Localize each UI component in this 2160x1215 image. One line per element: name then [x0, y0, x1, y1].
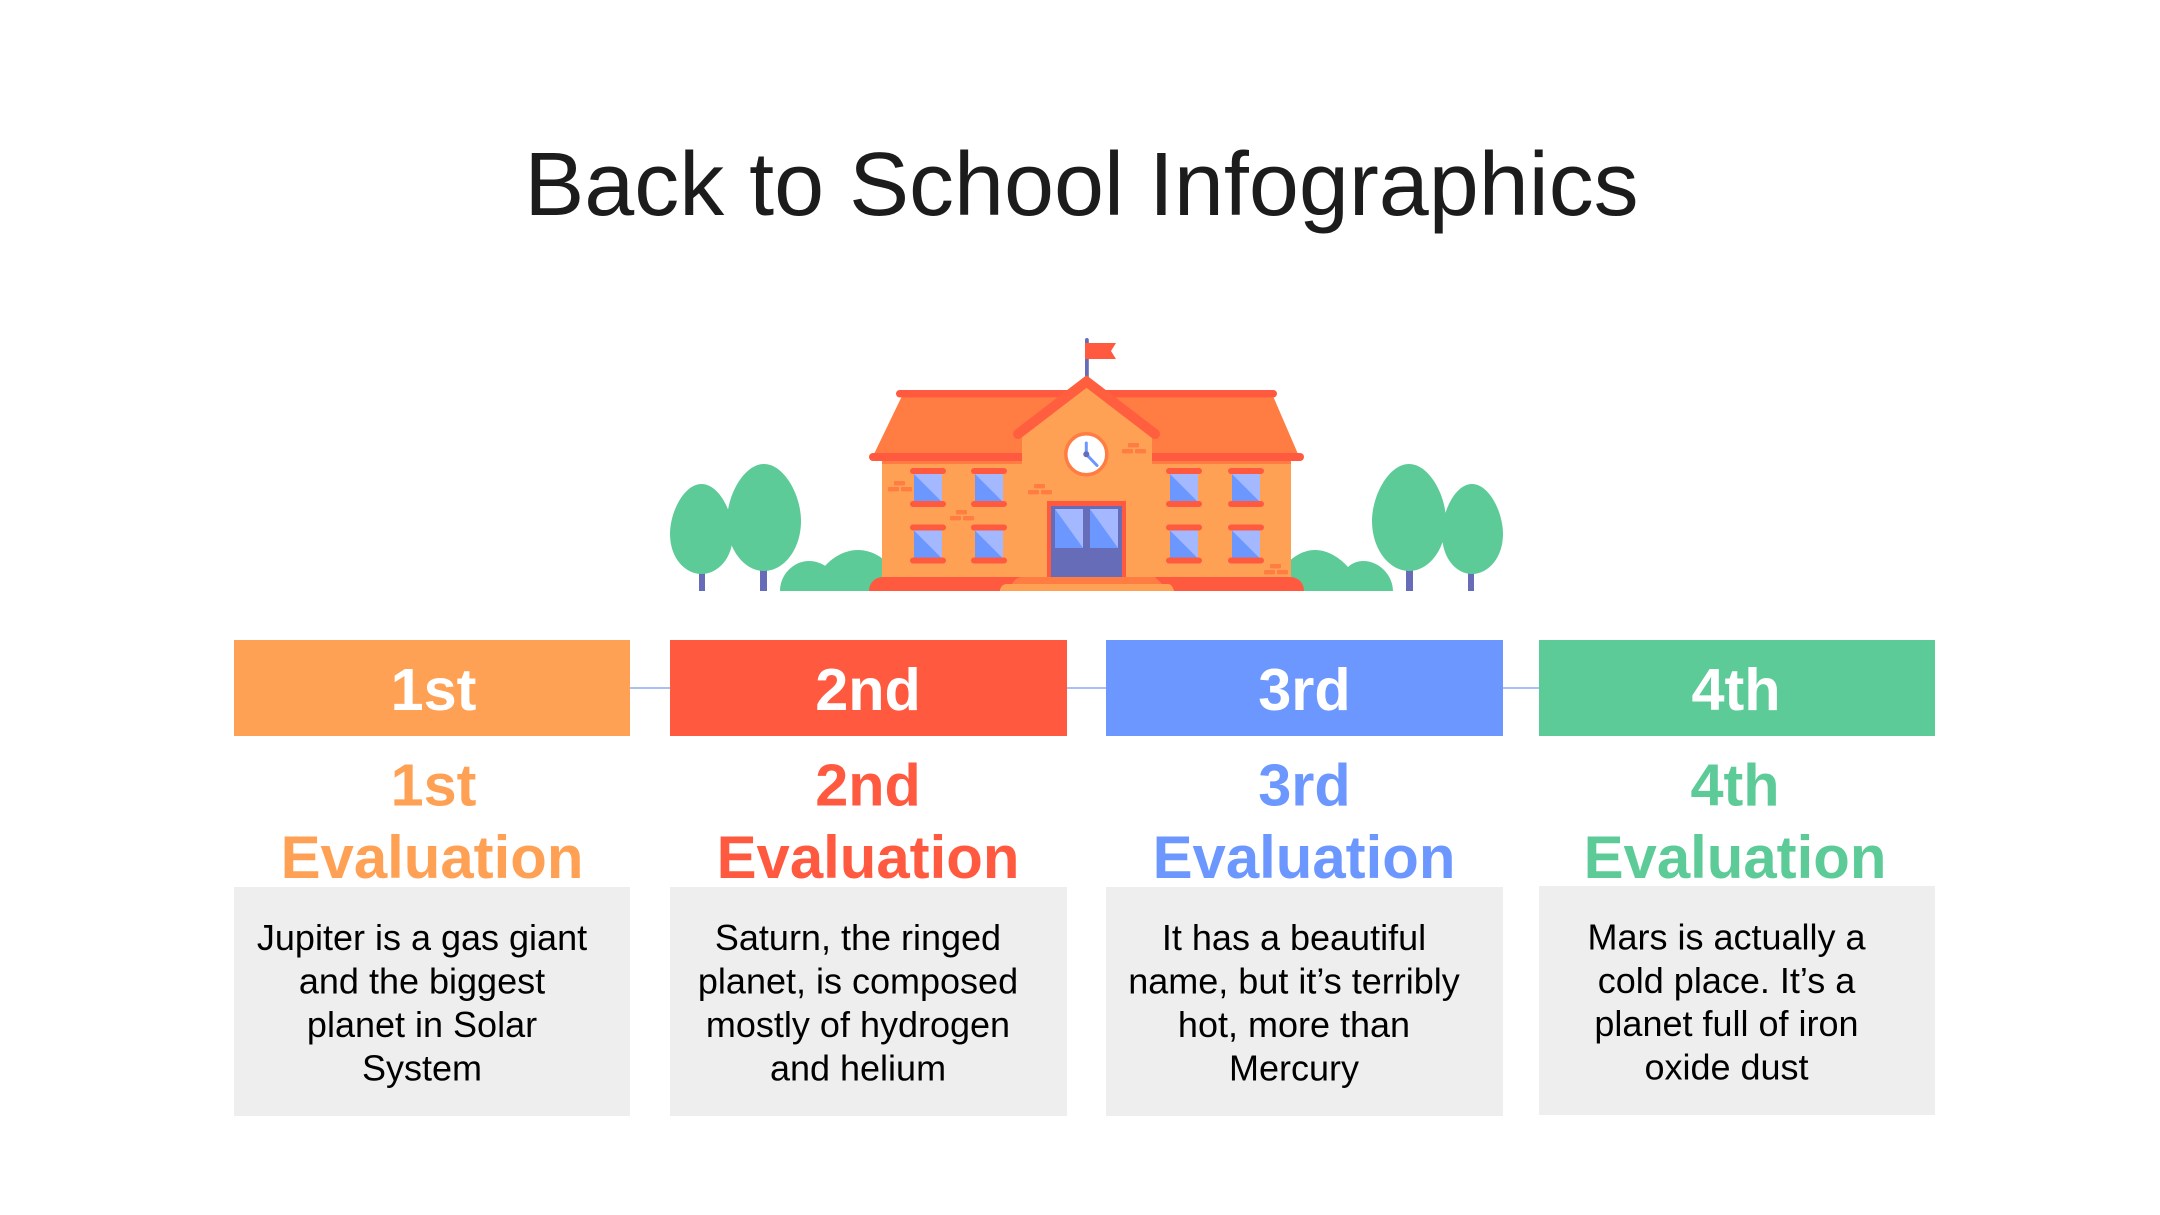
- description box: planet in Solar: [307, 1004, 537, 1045]
- description box: [1539, 886, 1935, 1115]
- panel: 2nd evaluation: [670, 640, 1067, 1116]
- header: 2nd: 2nd: [815, 656, 921, 723]
- description box: [234, 887, 630, 1116]
- header: 2nd: [670, 640, 1067, 736]
- icon: clock: [1066, 434, 1107, 475]
- panel: 4th evaluation: [1539, 640, 1935, 1115]
- description box: [1106, 887, 1503, 1116]
- panel: 3rd evaluation: [1106, 640, 1503, 1116]
- description box: Saturn, the ringed: [715, 917, 1001, 958]
- description box: planet full of iron: [1594, 1003, 1859, 1044]
- connector lines: [630, 687, 1539, 689]
- description box: System: [362, 1048, 482, 1088]
- heading: 4th Evaluation: 4th: [1690, 752, 1780, 818]
- header: 4th: 4th: [1691, 656, 1781, 723]
- icon: right bushes: [1285, 550, 1393, 591]
- heading: 2nd Evaluation: Evaluation: [717, 824, 1019, 891]
- title: Back to School Infographics: [524, 135, 1639, 235]
- description box: cold place. It’s a: [1598, 960, 1856, 1001]
- door: [1047, 501, 1126, 579]
- description box: Jupiter is a gas giant: [257, 917, 587, 958]
- description box: planet, is composed: [698, 960, 1018, 1002]
- walls: [882, 383, 1291, 585]
- description box: Mars is actually a: [1587, 916, 1867, 958]
- flag: [1085, 338, 1116, 380]
- icon: right trees: [1372, 464, 1503, 591]
- description box: Mercury: [1229, 1048, 1359, 1088]
- windows: [910, 468, 1264, 564]
- eaves: [869, 453, 1304, 464]
- heading: 3rd Evaluation: 3rd: [1258, 752, 1351, 818]
- description box: mostly of hydrogen: [706, 1004, 1010, 1045]
- description box: [670, 887, 1067, 1116]
- description box: name, but it’s terribly: [1128, 960, 1460, 1002]
- base and steps: [869, 577, 1304, 591]
- description box: and helium: [770, 1048, 946, 1088]
- roof: [874, 390, 1298, 454]
- header: 1st: [234, 640, 630, 736]
- bricks: [888, 443, 1288, 574]
- description box: and the biggest: [299, 960, 545, 1002]
- header: 4th: [1539, 640, 1935, 736]
- illustration: school with trees: [670, 338, 1503, 591]
- header: 1st: 1st: [391, 656, 477, 723]
- icon: school building: [869, 338, 1304, 591]
- heading: 3rd Evaluation: Evaluation: [1153, 824, 1455, 891]
- icon: left trees: [670, 464, 801, 591]
- header: 3rd: 3rd: [1258, 656, 1351, 723]
- heading: 2nd Evaluation: 2nd: [815, 752, 921, 818]
- icon: left bushes: [780, 550, 890, 591]
- panel: 1st evaluation: [234, 640, 630, 1116]
- description box: hot, more than: [1178, 1004, 1410, 1045]
- heading: 1st Evaluation: Evaluation: [281, 824, 583, 891]
- description box: oxide dust: [1644, 1046, 1809, 1088]
- heading: 1st Evaluation: 1st: [391, 752, 477, 818]
- description box: It has a beautiful: [1162, 917, 1426, 958]
- header: 3rd: [1106, 640, 1503, 736]
- gable trim: [1018, 382, 1155, 434]
- heading: 4th Evaluation: Evaluation: [1584, 824, 1886, 891]
